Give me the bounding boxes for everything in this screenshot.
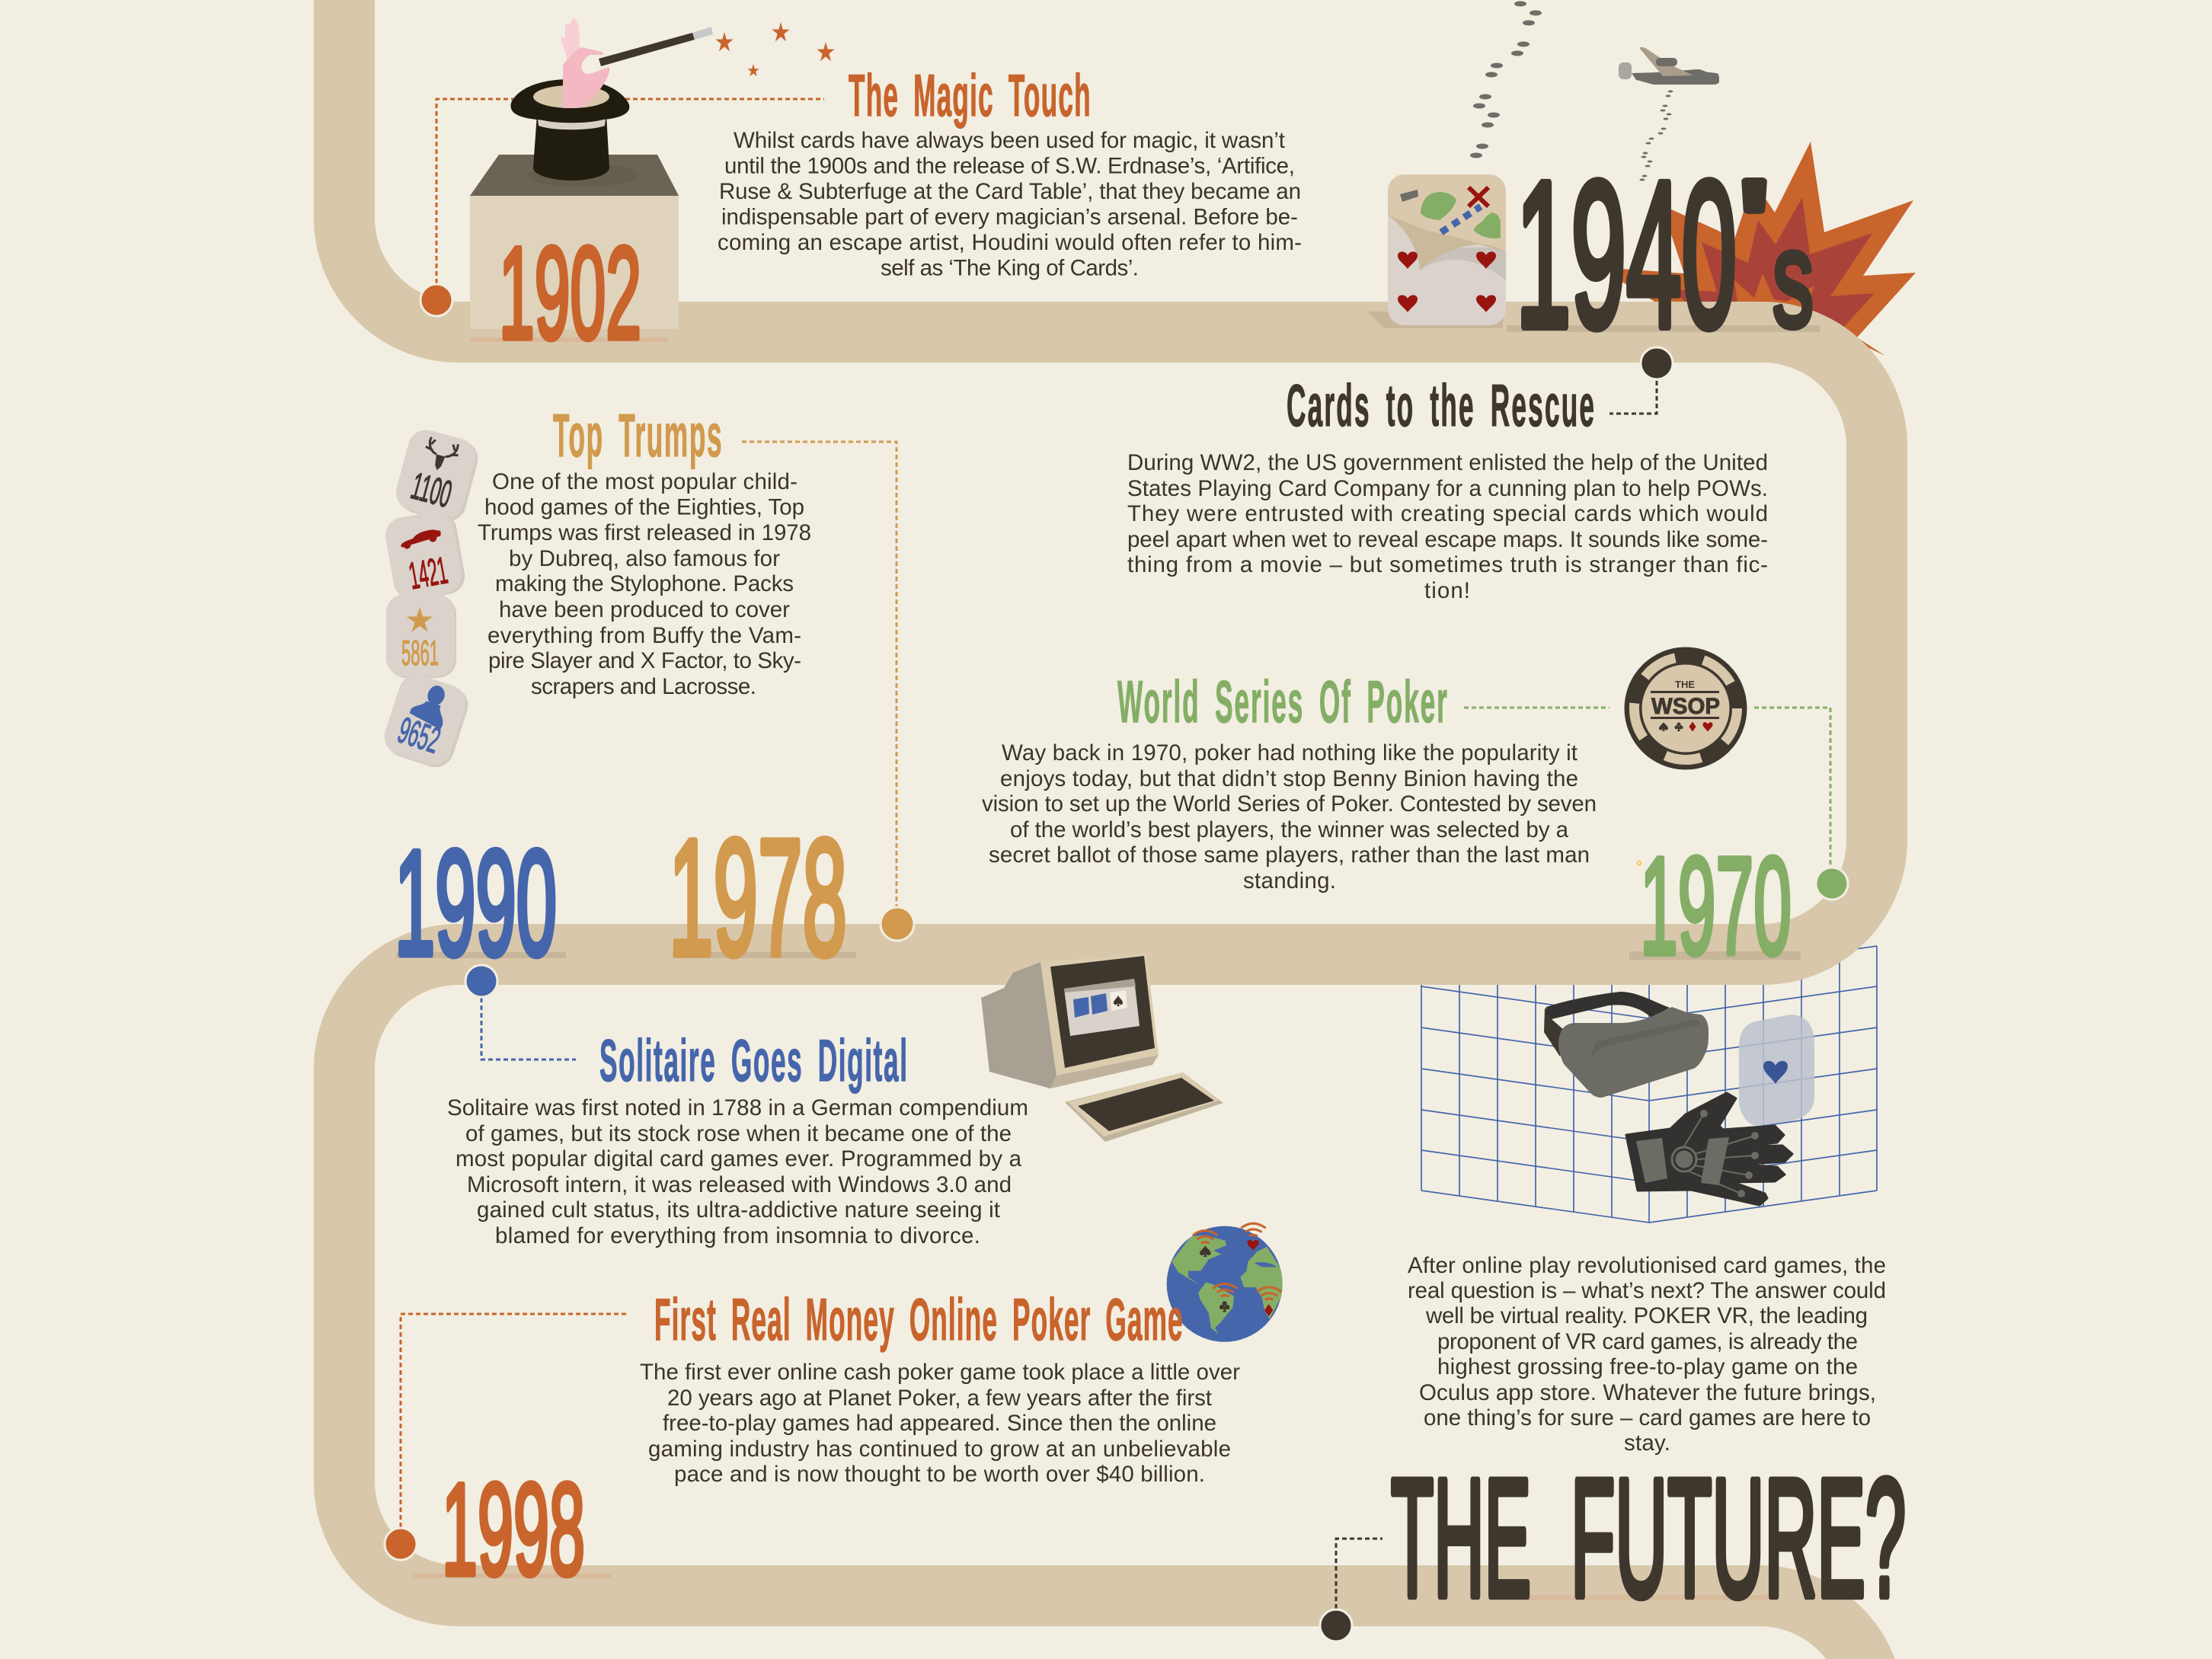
card hearts	[1398, 251, 1496, 312]
dot: 1978	[881, 907, 914, 941]
text: The Magic Touch: until the 1900s and the release of S.W. Erdnase’s, ‘Artifice,	[724, 154, 1295, 178]
heading: First Real Money Online Poker Game: First Real Money Online Poker Game	[654, 1286, 1183, 1353]
icon: bomber plane	[1619, 47, 1719, 85]
text: World Series Of Poker: enjoys today, but that didn’t stop Benny Binion having the	[1000, 766, 1578, 791]
map fold	[1388, 215, 1506, 270]
text: First Real Money Online Poker Game: gaming industry has continued to grow at an unbelievable	[648, 1437, 1231, 1462]
card: car: 1421	[406, 550, 451, 598]
text: Solitaire Goes Digital: Microsoft intern, it was released with Windows 3.0 and	[467, 1172, 1012, 1197]
dot: 1970	[1816, 868, 1848, 900]
heading: Cards to the Rescue: Cards to the Rescue	[1287, 372, 1594, 439]
hat shadow	[527, 164, 638, 187]
text: The Future: one thing’s for sure – card games are here to	[1424, 1405, 1871, 1430]
heading: THE FUTURE?	[1391, 1445, 1906, 1632]
icon: explosion	[1612, 142, 1916, 356]
section: The Magic Touch connector	[436, 99, 824, 283]
text: Top Trumps: hood games of the Eighties, Top	[484, 495, 804, 519]
map chip	[1400, 190, 1418, 202]
text: Top Trumps: everything from Buffy the Vam-	[487, 623, 801, 648]
heading: The Magic Touch: The Magic Touch	[849, 62, 1091, 129]
text: Top Trumps: Trumps was first released in 1978	[478, 520, 811, 545]
VR wireframe grid	[1421, 946, 1877, 1223]
text: Top Trumps: making the Stylophone. Packs	[495, 571, 794, 596]
icon: WSOP poker chip: THE	[1675, 679, 1695, 690]
hat brim	[510, 79, 629, 121]
text: Cards to the Rescue: During WW2, the US government enlisted the help of the United	[1127, 450, 1768, 475]
text: The Future: highest grossing free-to-play game on the	[1437, 1354, 1858, 1379]
heading: Top Trumps: Top Trumps	[553, 402, 722, 470]
text: Cards to the Rescue: States Playing Card Company for a cunning plan to help POWs.	[1127, 476, 1768, 501]
year 1990: 1990	[395, 819, 557, 986]
card: car	[382, 508, 468, 603]
text: The Magic Touch: coming an escape artist, Houdini would often refer to him-	[718, 230, 1302, 255]
icon: WSOP poker chip: WSOP	[1651, 694, 1720, 719]
dot: 1990	[465, 965, 497, 997]
text: The Future: After online play revolutionised card games, the	[1408, 1253, 1886, 1278]
dot: The Future	[1320, 1609, 1352, 1641]
map X	[1469, 187, 1488, 206]
text: Top Trumps: scrapers and Lacrosse.	[531, 674, 756, 699]
text: Top Trumps: One of the most popular child-	[492, 469, 798, 494]
map sheet	[1388, 174, 1506, 253]
text: Solitaire Goes Digital: gained cult status, its ultra-addictive nature seeing it	[477, 1197, 1000, 1223]
text: The Future: stay.	[1624, 1430, 1670, 1456]
icon: escape map playing card	[1367, 174, 1506, 328]
text: First Real Money Online Poker Game: The first ever online cash poker game took place a little over	[640, 1360, 1240, 1385]
icon: globe with wifi signals	[1167, 1223, 1285, 1342]
hand	[563, 47, 609, 108]
text: Solitaire Goes Digital: of games, but its stock rose when it became one of the	[465, 1121, 1012, 1146]
year 1940's	[1507, 140, 1820, 370]
icon: VR glove	[1626, 1093, 1792, 1205]
text: Cards to the Rescue	[1127, 450, 1768, 603]
text: The Future: real question is – what’s next? The answer could	[1408, 1278, 1886, 1303]
text: First Real Money Online Poker Game	[640, 1360, 1240, 1487]
text: First Real Money Online Poker Game: 20 years ago at Planet Poker, a few years after the first	[667, 1386, 1212, 1411]
heading: Solitaire Goes Digital: Solitaire Goes Digital	[599, 1027, 907, 1094]
icon: magic stars	[716, 22, 834, 76]
text: World Series Of Poker: of the world’s best players, the winner was selected by a	[1010, 817, 1569, 842]
year 1940's: s	[1772, 202, 1814, 355]
hat crown	[533, 114, 609, 181]
text: Solitaire Goes Digital	[447, 1095, 1028, 1248]
text: The Magic Touch: Whilst cards have always been used for magic, it wasn’t	[734, 128, 1285, 153]
icon: WSOP poker chip	[1624, 647, 1747, 769]
text: First Real Money Online Poker Game: free-to-play games had appeared. Since then the online	[663, 1411, 1216, 1436]
illustration: magic hat on box	[470, 18, 713, 329]
card shadow	[1367, 312, 1503, 328]
dot: 1902	[420, 284, 452, 316]
year 1940's: '	[1737, 152, 1771, 302]
card: person	[379, 670, 473, 772]
text: Cards to the Rescue: thing from a movie – but sometimes truth is stranger than fic-	[1127, 552, 1768, 577]
year 1998: 1998	[442, 1456, 585, 1603]
box front	[470, 196, 679, 329]
hand back fingers	[561, 18, 580, 65]
year 1902: 1902	[499, 220, 641, 366]
icon: VR card hologram	[1739, 1015, 1814, 1126]
card: stag: 1100	[407, 465, 456, 516]
text: The Magic Touch: self as ‘The King of Cards’.	[881, 256, 1139, 280]
year 1940's: 1940	[1516, 140, 1737, 370]
map route	[1441, 206, 1481, 232]
text: Cards to the Rescue: peel apart when wet to reveal escape maps. It sounds like some-	[1127, 527, 1768, 552]
wand	[599, 33, 695, 66]
text: Cards to the Rescue: tion!	[1424, 578, 1470, 603]
heading: THE FUTURE?: FUTURE?	[1571, 1445, 1906, 1632]
text: World Series Of Poker: vision to set up the World Series of Poker. Contested by seven	[982, 791, 1597, 817]
section: Top Trumps connector	[742, 442, 897, 906]
text: The Future	[1408, 1253, 1886, 1456]
card face	[1388, 174, 1506, 325]
section: Solitaire connector	[481, 998, 576, 1060]
box top	[470, 155, 679, 196]
section: The Future connector	[1336, 1539, 1382, 1609]
peel shadow	[1420, 248, 1506, 280]
icon: VR headset	[1544, 992, 1709, 1098]
card: person: 9652	[393, 709, 446, 761]
text: Solitaire Goes Digital: most popular digital card games ever. Programmed by a	[456, 1146, 1022, 1172]
hat band	[538, 119, 606, 129]
text: Top Trumps: pire Slayer and X Factor, to Sky-	[488, 648, 801, 673]
icon: retro computer	[981, 953, 1223, 1142]
text: The Magic Touch: Ruse & Subterfuge at the Card Table’, that they became an	[719, 179, 1301, 204]
text: Cards to the Rescue: They were entrusted with creating special cards which would	[1127, 501, 1768, 526]
heading: THE FUTURE?: THE	[1391, 1445, 1531, 1632]
section: Cards to the Rescue connector	[1609, 381, 1657, 414]
text: World Series Of Poker: secret ballot of those same players, rather than the last man	[989, 842, 1590, 868]
text: The Future: Oculus app store. Whatever the future brings,	[1419, 1380, 1876, 1405]
text: Top Trumps: by Dubreq, also famous for	[509, 546, 780, 571]
text: The Magic Touch: indispensable part of every magician’s arsenal. Before be-	[721, 204, 1298, 230]
heading: World Series Of Poker: World Series Of Poker	[1117, 668, 1447, 735]
dot: 1998	[385, 1528, 417, 1560]
section: Online Poker connector	[401, 1314, 629, 1527]
year 1978: 1978	[669, 804, 847, 989]
timeline ribbon path	[344, 0, 1877, 1659]
section: World Series connectors	[1464, 708, 1830, 865]
text: The Magic Touch	[718, 128, 1302, 280]
text: The Future: well be virtual reality. POKER VR, the leading	[1425, 1303, 1868, 1328]
text: Top Trumps	[478, 469, 811, 699]
text: Top Trumps: have been produced to cover	[499, 597, 790, 622]
dot: 1940s	[1641, 347, 1673, 379]
card: stag	[392, 426, 482, 526]
map islands	[1421, 192, 1456, 220]
text: Solitaire Goes Digital: blamed for everything from insomnia to divorce.	[495, 1223, 980, 1248]
text: Solitaire Goes Digital: Solitaire was first noted in 1788 in a German compendium	[447, 1095, 1028, 1120]
text: The Future: proponent of VR card games, is already the	[1437, 1329, 1858, 1354]
text: World Series Of Poker	[982, 740, 1597, 893]
icon: Top Trumps card stack	[379, 426, 482, 772]
illustration: falling bombs	[1470, 2, 1673, 181]
card: star: 5861	[401, 633, 439, 673]
card: star	[386, 594, 456, 678]
year 1970: 1970	[1640, 829, 1792, 984]
text: World Series Of Poker: standing.	[1243, 868, 1336, 893]
text: First Real Money Online Poker Game: pace and is now thought to be worth over $40 billion.	[674, 1462, 1205, 1487]
text: World Series Of Poker: Way back in 1970, poker had nothing like the popularity it	[1002, 740, 1577, 766]
